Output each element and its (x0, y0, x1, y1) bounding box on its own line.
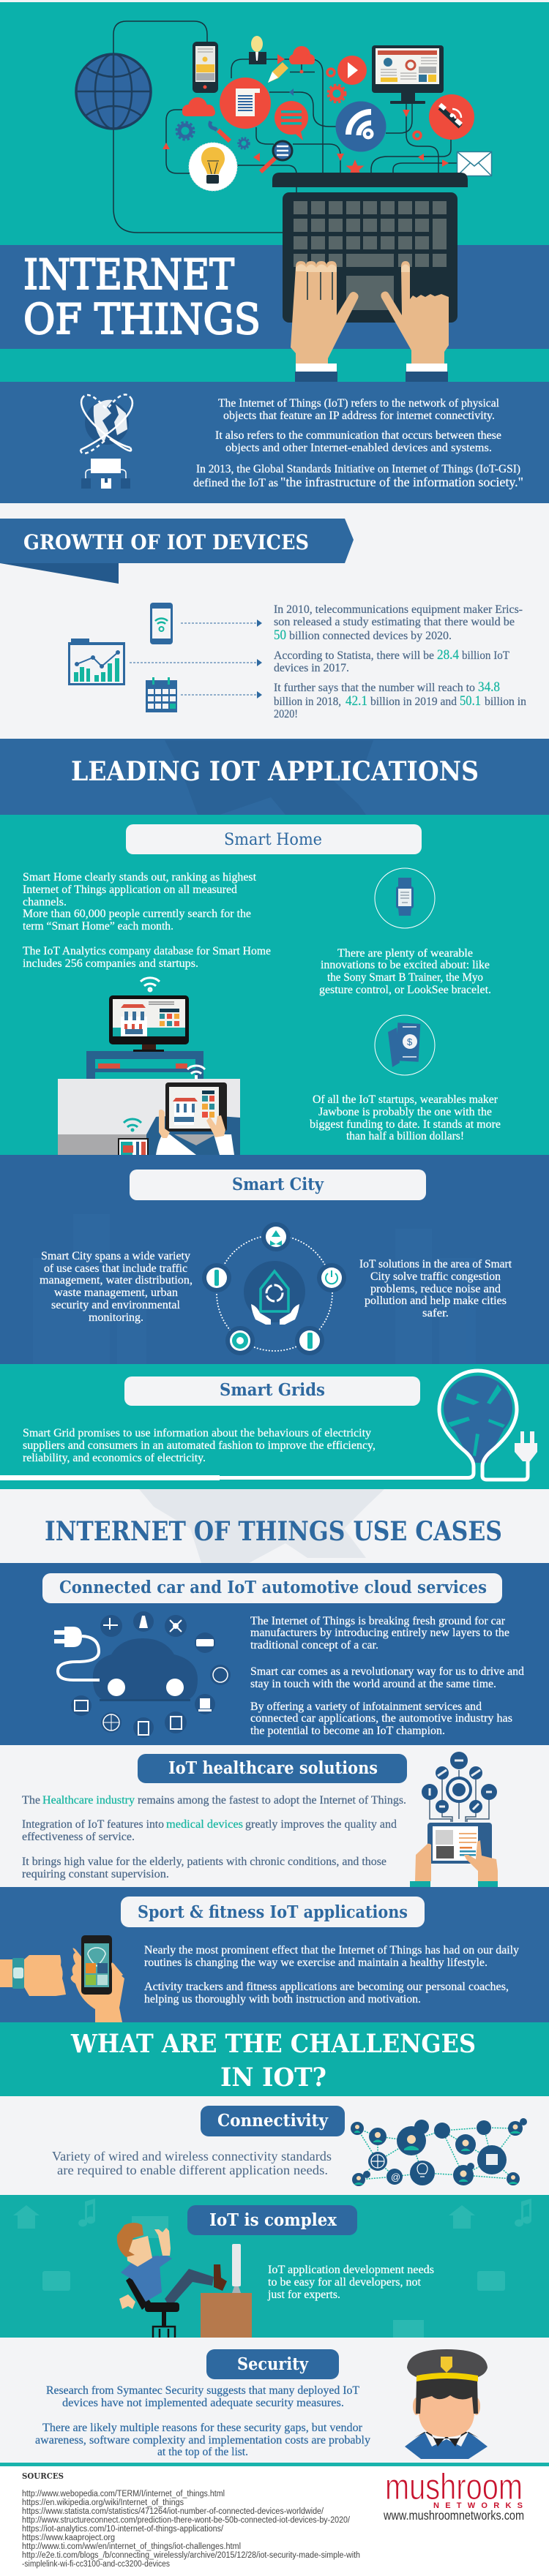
panel: iot is complex (0, 2195, 549, 2338)
icon: hands (291, 261, 449, 382)
title: OF THINGS (23, 295, 261, 344)
icon: globe with orbits (81, 395, 132, 453)
text block: connected car: Smart car comes as a revolutionary way for us to drive and (250, 1665, 524, 1678)
icon: healthcare tablet (410, 1752, 498, 1887)
heading: sources: SOURCES (22, 2471, 64, 2481)
text block: growth statistics: 34.8 (478, 679, 500, 695)
text block: connected car: By offering a variety of infotainment services and (250, 1701, 482, 1713)
heading pill: Security (237, 2354, 309, 2374)
text block: connectivity: are required to enable different application needs. (57, 2163, 328, 2177)
text block: introduction: It also refers to the communication that occurs between these (215, 429, 501, 442)
text block: smart city right: problems, reduce noise and (370, 1283, 501, 1295)
text block: connectivity: Variety of wired and wireless connectivity standards (52, 2149, 332, 2163)
text block: growth statistics: 42.1 (346, 693, 367, 709)
text block: growth statistics: It further says that the number will reach to (274, 682, 475, 694)
text block: wearables: gesture control, or LookSee bracelet. (319, 984, 491, 996)
text block: security: devices have not implemented adequate security measures. (62, 2397, 344, 2409)
text block: wearables: innovations to be excited about: like (321, 959, 490, 971)
icon: phone with wifi (150, 603, 173, 644)
text block: connected car: manufacturers by introducing entirely new layers to the (250, 1627, 509, 1639)
panel: use cases header (0, 1489, 549, 1563)
heading pill (121, 1897, 425, 1927)
text block: smart city right: pollution and help make cities (365, 1295, 507, 1307)
text block: smart grids: reliability, and economics of electricity. (23, 1452, 206, 1464)
text block: growth statistics (274, 603, 526, 720)
icon: shelf (86, 1051, 203, 1079)
heading pill (124, 1376, 420, 1406)
text block: sources list: -simplelink-wi-fi-cc3100-and-cc3200-devices (22, 2560, 170, 2569)
text block: introduction: objects that feature an IP address for internet connectivity. (223, 410, 495, 422)
icons: car services (71, 1611, 231, 1738)
text block: security (35, 2384, 370, 2458)
panel: connectivity (0, 2096, 549, 2195)
text block: introduction: objects and other Internet-enabled devices and systems. (225, 442, 492, 454)
heading pill: Sport & fitness IoT applications (138, 1902, 408, 1922)
text block: sport and fitness (144, 1944, 519, 2006)
heading pill: Smart City (232, 1175, 324, 1194)
heading: IN IOT? (220, 2063, 326, 2093)
icon: star (346, 159, 365, 177)
text block: healthcare: effectiveness of service. (22, 1831, 135, 1843)
text block: sport and fitness: Activity trackers and fitness applications are becoming our personal coaches, (144, 1981, 509, 1993)
heading pill (138, 1754, 407, 1783)
title (23, 251, 261, 344)
heading (70, 2029, 476, 2093)
text block: iot is complex: just for experts. (267, 2289, 340, 2301)
heading pill: Smart Grids (220, 1380, 325, 1400)
panel: smart home (0, 815, 549, 1155)
text block: connected car: The Internet of Things is breaking fresh ground for car (250, 1615, 506, 1627)
text block: wearables (319, 947, 491, 996)
diagram: people network: @ (391, 2172, 400, 2183)
icon: wifi (141, 978, 160, 991)
connecting wires (113, 21, 458, 233)
heading ribbon: GROWTH OF IOT DEVICES (23, 530, 309, 554)
text block: healthcare (22, 1794, 406, 1880)
heading pill (206, 2349, 339, 2379)
icon: security guard (405, 2349, 488, 2459)
icon: gears and wrench (176, 121, 249, 149)
text block: growth statistics: billion connected devices by 2020. (289, 630, 452, 642)
icon: wifi circle (335, 101, 386, 152)
text block: healthcare: It brings high value for the elderly, patients with chronic conditions, and those (22, 1856, 386, 1868)
text block: healthcare: Healthcare industry (42, 1794, 135, 1807)
text block: healthcare: requiring constant supervision. (22, 1868, 169, 1880)
heading pill (187, 2205, 357, 2235)
text block: sources list: https://www.statista.com/statistics/471264/iot-number-of-connected-devices-worldwide/ (22, 2507, 324, 2516)
icon: calendar (146, 677, 177, 712)
heading pill (130, 1170, 426, 1200)
text block: smart grids (23, 1427, 376, 1464)
text block: iot is complex (267, 2264, 434, 2301)
icon: recycle node (261, 1222, 291, 1251)
text block: connectivity (52, 2149, 332, 2177)
icon: chart window (68, 639, 125, 685)
icon: money (375, 1015, 435, 1075)
text block: smart home description: Smart Home clearly stands out, ranking as highest (23, 871, 257, 884)
panel: tablet scene (58, 1066, 240, 1155)
text block: growth statistics: billion IoT (462, 649, 510, 662)
text block: smart home description: term “Smart Home” each month. (23, 920, 173, 933)
icon: power cord and bulb (0, 1371, 537, 1480)
text block: smart city left (40, 1250, 193, 1324)
text block: smart city left: of use cases that include traffic (44, 1262, 187, 1275)
text block: smart city left: monitoring. (89, 1311, 143, 1324)
text block: jawbone (310, 1093, 501, 1142)
text block: sources list: https://www.kaaproject.org (22, 2534, 115, 2542)
icon: central house and hands (244, 1261, 305, 1325)
icon: tree node (202, 1263, 231, 1292)
illustration: smart home devices (58, 978, 240, 1155)
heading pill: Smart Home (224, 831, 322, 849)
text block: jawbone: Of all the IoT startups, wearables maker (313, 1093, 498, 1106)
text block: growth statistics: son released a study estimating that there would be (274, 616, 515, 628)
text block: healthcare: medical devices (166, 1818, 243, 1831)
panel: security (0, 2338, 549, 2463)
text block: smart city left: Smart City spans a wide variety (41, 1250, 190, 1262)
heading pill: Connected car and IoT automotive cloud services (59, 1578, 487, 1597)
text block: sport and fitness: Nearly the most prominent effect that the Internet of Things has had on our daily (144, 1944, 519, 1957)
text block: security: There are likely multiple reasons for these security gaps, but vendor (42, 2422, 363, 2434)
icon: ring node (225, 1326, 255, 1355)
text block: connected car: stay in touch with the world around at the same time. (250, 1678, 496, 1690)
text block: growth statistics: billion in 2018, (274, 696, 341, 708)
icon: wrist and phone (0, 1935, 124, 2022)
text block: sport and fitness: routines is changing the way we exercise and maintain a healthy lifestyle. (144, 1957, 488, 1969)
icon: pencil (268, 62, 288, 83)
heading pill: IoT is complex (209, 2210, 337, 2230)
text block: connected car: the potential to become an IoT champion. (250, 1725, 445, 1737)
text block: security: Research from Symantec Security suggests that many deployed IoT (46, 2384, 360, 2397)
icon: globe (76, 54, 151, 129)
text block: smart home description: Internet of Things application on all measured (23, 884, 237, 896)
text block: smart city right (359, 1258, 512, 1319)
text block: sources list (22, 2490, 360, 2569)
text block: wearables: the Sony Smart B Trainer, the Myo (327, 971, 483, 984)
heading pill: IoT healthcare solutions (168, 1758, 378, 1778)
text block: smart grids: Smart Grid promises to use information about the behaviours of electricity (23, 1427, 371, 1439)
text block: jawbone: biggest funding to date. It stands at more (310, 1118, 501, 1131)
panel: healthcare (0, 1745, 549, 1887)
text block: growth statistics: In 2010, telecommunications equipment maker Erics- (274, 603, 523, 616)
text block: smart home description (23, 871, 271, 970)
icon: magnifier (253, 141, 292, 172)
logo: mushroom networks: www.mushroomnetworks.com (383, 2508, 524, 2523)
icon: traffic light node (295, 1326, 324, 1355)
panel: growth of iot devices (0, 503, 549, 739)
text block: sources list: http://e2e.ti.com/blogs_/b/connecting_wirelessly/archive/2015/12/28/iot-security-made-simple-with (22, 2551, 360, 2560)
heading pill (201, 2106, 345, 2136)
heading: WHAT ARE THE CHALLENGES (70, 2029, 476, 2059)
icon: connected boxes (81, 459, 130, 489)
heading pill: Connectivity (217, 2111, 329, 2131)
icon: document circle (220, 78, 271, 129)
panel: smart city (0, 1155, 549, 1364)
panel: smart grids (0, 1364, 549, 1489)
icon: monitor (109, 995, 189, 1052)
icon: left cloud (163, 97, 215, 149)
heading ribbon (0, 519, 354, 584)
text block: introduction: In 2013, the Global Standards Initiative on Internet of Things (IoT-GSI) (196, 463, 520, 475)
icon: phone circle (429, 94, 474, 140)
icon: laptop (272, 173, 468, 323)
heading pill (42, 1573, 502, 1603)
illustration: developer at desk (117, 2223, 252, 2338)
text block: iot is complex: to be easy for all developers, not (268, 2276, 422, 2289)
text block: smart home description: More than 60,000 people currently search for the (23, 908, 251, 920)
text block: smart home description: includes 256 companies and startups. (23, 957, 198, 970)
text block: security: awareness, software complexity and implementation costs are probably (35, 2434, 370, 2447)
text block: smart city right: safer. (422, 1307, 449, 1319)
panel: sport and fitness (0, 1887, 549, 2022)
icon: money: $ (407, 1036, 413, 1047)
text block: healthcare: The (22, 1794, 40, 1807)
text block: connected car (250, 1615, 524, 1737)
icon: smartphone (193, 42, 218, 93)
text block: introduction: defined the IoT as (193, 477, 278, 489)
diagram: smart city cycle (202, 1222, 346, 1355)
text block: growth statistics: billion in (485, 696, 526, 708)
text block: sport and fitness: helping us thoroughly with both instruction and motivation. (144, 1993, 421, 2006)
text block: smart home description: The IoT Analytics company database for Smart Home (23, 945, 271, 957)
text block: iot is complex: IoT application development needs (268, 2264, 434, 2276)
arrows (130, 619, 262, 698)
text block: growth statistics: According to Statista, there will be (274, 649, 434, 662)
icon: envelope (337, 152, 492, 176)
text block: sources list: https://en.wikipedia.org/wiki/Internet_of_things (22, 2498, 184, 2507)
text block: jawbone: Jawbone is probably the one with the (318, 1106, 492, 1118)
panel: challenges header (0, 2022, 549, 2096)
panel: introduction (0, 382, 549, 503)
text block: growth statistics: 2020! (274, 708, 298, 720)
text block: smart home description: channels. (23, 896, 67, 908)
text block: connected car: traditional concept of a car. (250, 1639, 378, 1652)
text block: growth statistics: 50 (274, 628, 286, 643)
icon: play and gears (289, 56, 421, 139)
icon: connected car (54, 1627, 198, 1701)
text block: sources list: http://www.webopedia.com/TERM/I/internet_of_things.html (22, 2490, 225, 2498)
text block: growth statistics: 50.1 (460, 693, 481, 709)
icon: top cloud (277, 46, 315, 73)
text block: wearables: There are plenty of wearable (337, 947, 473, 960)
text block: smart grids: suppliers and consumers in an automated fashion to improve the efficiency, (23, 1439, 376, 1452)
heading: LEADING IOT APPLICATIONS (71, 756, 479, 787)
icon: lightbulb (189, 143, 237, 191)
diagram: people network (351, 2118, 527, 2186)
icon: person (249, 36, 266, 64)
icon: smartwatch (375, 868, 435, 928)
text block: growth statistics: billion in 2019 and (370, 696, 457, 708)
text block: sources list: https://iot-analytics.com/10-internet-of-things-applications/ (22, 2525, 224, 2534)
text block: smart city left: management, water distribution, (40, 1274, 193, 1287)
text block: security: at the top of the list. (157, 2446, 248, 2458)
text block: sources list: http://www.ti.com/ww/en/internet_of_things/iot-challenges.html (22, 2542, 241, 2551)
text block: healthcare: remains among the fastest to adopt the Internet of Things. (138, 1794, 406, 1807)
text block: introduction: "the infrastructure of the information society." (280, 475, 523, 489)
text block: introduction (193, 397, 523, 489)
text block: smart city left: security and environmental (51, 1299, 180, 1311)
text block: connected car: connected car applications, the automotive industry has (250, 1712, 512, 1725)
text block: healthcare: Integration of IoT features into (22, 1818, 164, 1831)
text block: growth statistics: 28.4 (437, 647, 459, 663)
icon: speech bubble (274, 101, 308, 140)
text block: smart city right: City solve traffic congestion (370, 1270, 501, 1283)
panel: footer (0, 2463, 549, 2576)
text block: jawbone: than half a billion dollars! (346, 1130, 464, 1142)
panel: leading iot applications header (0, 739, 549, 815)
title: INTERNET (23, 251, 234, 299)
text block: sources list: http://www.structureconnect.com/prediction-there-wont-be-50b-connected-iot-devices-by-2020/ (22, 2516, 351, 2525)
text block: growth statistics: devices in 2017. (274, 662, 349, 674)
heading pill (126, 824, 422, 854)
panel: connected car (0, 1563, 549, 1745)
logo: mushroom networks (383, 2466, 524, 2523)
icon: monitor (372, 45, 444, 117)
text block: smart city right: IoT solutions in the area of Smart (359, 1258, 512, 1270)
text block: smart city left: waste management, urban (54, 1287, 178, 1299)
logo: mushroom networks: NETWORKS (433, 2501, 523, 2510)
text block: healthcare: greatly improves the quality and (245, 1818, 397, 1831)
panel: hero (0, 2, 549, 382)
icon: power node (317, 1263, 346, 1292)
text block: introduction: The Internet of Things (IoT) refers to the network of physical (218, 397, 499, 410)
